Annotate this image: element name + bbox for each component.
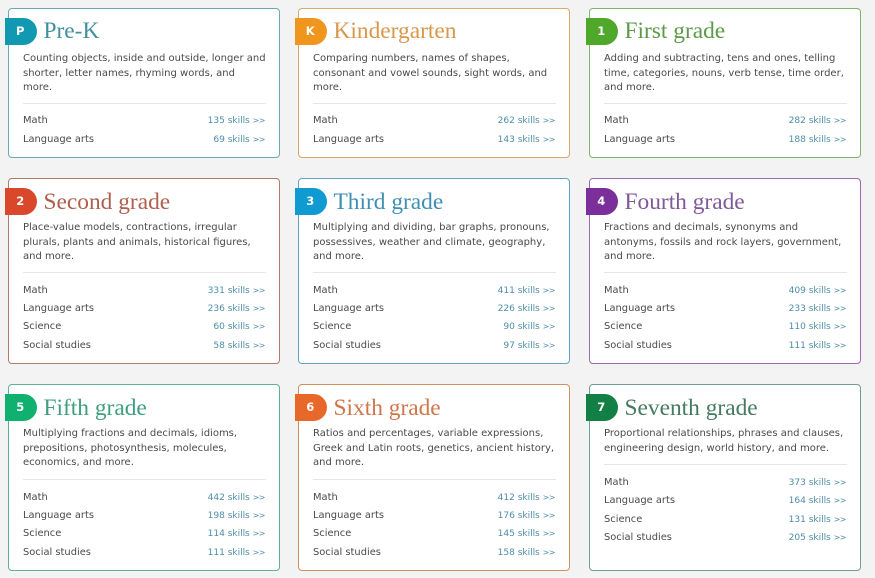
badge: 6: 6 [306, 400, 314, 414]
description [313, 53, 547, 93]
row: Math: 135 skills >> [208, 116, 265, 126]
badge: 7 [586, 394, 618, 421]
badge: 2 [5, 188, 36, 215]
row: Social studies: Social studies [604, 340, 672, 351]
badge: 1 [586, 18, 618, 45]
row: Language arts: 226 skills >> [498, 304, 555, 314]
row: Science: Science [23, 321, 61, 332]
row: Math: Math [604, 285, 629, 296]
row: Science [23, 321, 265, 332]
row: Math: 409 skills >> [789, 286, 846, 296]
description [23, 428, 237, 468]
badge: 1: 1 [597, 24, 605, 38]
row: Language arts: Language arts [313, 303, 384, 314]
row: Social studies: Social studies [313, 547, 381, 558]
row: Science: 90 skills >> [503, 322, 555, 332]
description: Fractions and decimals, synonyms and [604, 222, 798, 233]
badge: P [5, 18, 36, 45]
row: Science [604, 514, 846, 525]
row: Language arts: Language arts [23, 134, 94, 145]
row: Math [23, 115, 265, 126]
panel: Pre-K [8, 8, 280, 158]
row: Language arts: Language arts [604, 134, 675, 145]
description: plurals, plants and animals, historical figures, [23, 237, 251, 248]
badge: 6 [295, 394, 326, 421]
row: Math: Math [604, 477, 629, 488]
row: Math [313, 492, 555, 503]
row: Social studies [313, 340, 555, 351]
row: Math [604, 477, 846, 488]
row: Science: 131 skills >> [789, 515, 846, 525]
description: and more. [23, 251, 74, 262]
description: Proportional relationships, phrases and clauses, [604, 428, 843, 439]
row: Language arts [313, 510, 555, 521]
row: Math: 262 skills >> [498, 116, 555, 126]
description: Ratios and percentages, variable expressions, [313, 428, 543, 439]
description [604, 428, 843, 454]
row: Social studies [23, 547, 265, 558]
row: Language arts [604, 495, 846, 506]
badge: P: P [16, 24, 24, 38]
description: more. [23, 82, 52, 93]
description: and more. [604, 251, 655, 262]
heading: Fifth grade: Fifth grade [44, 395, 147, 421]
badge: K [295, 18, 326, 45]
heading: Pre-K: Pre-K [44, 18, 99, 44]
panel: Fourth grade [589, 178, 861, 364]
row: Math: 331 skills >> [208, 286, 265, 296]
row: Language arts: Language arts [23, 510, 94, 521]
row: Social studies: Social studies [313, 340, 381, 351]
row: Math [313, 115, 555, 126]
row: Language arts: 198 skills >> [208, 511, 265, 521]
description: consonant and vowel sounds, sight words, and [313, 68, 547, 79]
panel: Third grade [298, 178, 570, 364]
description [313, 428, 554, 468]
description: possessives, weather and climate, geography, [313, 237, 545, 248]
row: Science [313, 321, 555, 332]
description: and more. [604, 82, 655, 93]
description: shorter, letter names, rhyming words, and [23, 68, 235, 79]
panel: Seventh grade [589, 384, 861, 571]
description: and more. [313, 251, 364, 262]
description [604, 53, 844, 93]
row: Science: 60 skills >> [213, 322, 265, 332]
row: Science: Science [604, 321, 642, 332]
row: Math: Math [23, 285, 48, 296]
badge: 4 [586, 188, 618, 215]
badge: K: K [306, 24, 315, 38]
row: Science: 114 skills >> [208, 529, 265, 539]
heading: Seventh grade: Seventh grade [624, 395, 758, 421]
description: antonyms, fossils and rock layers, government, [604, 237, 841, 248]
row: Math [604, 115, 846, 126]
panel: Second grade [8, 178, 280, 364]
row: Language arts: Language arts [604, 303, 675, 314]
description: Greek and Latin roots, genetics, ancient history, [313, 443, 554, 454]
heading: Fourth grade: Fourth grade [624, 189, 745, 215]
heading: Second grade: Second grade [44, 189, 170, 215]
description [313, 222, 550, 262]
description [604, 222, 841, 262]
description: Multiplying and dividing, bar graphs, pronouns, [313, 222, 550, 233]
panel: Kindergarten [298, 8, 570, 158]
row: Language arts: Language arts [23, 303, 94, 314]
row: Math: Math [313, 115, 338, 126]
badge: 5 [5, 394, 36, 421]
row: Math [23, 285, 265, 296]
row: Science [604, 321, 846, 332]
badge: 4: 4 [597, 194, 605, 208]
row: Math: 373 skills >> [789, 478, 846, 488]
row: Science: 110 skills >> [789, 322, 846, 332]
row: Language arts: 164 skills >> [789, 496, 846, 506]
row: Social studies: 158 skills >> [498, 548, 555, 558]
row: Math [604, 285, 846, 296]
badge: 2: 2 [16, 194, 24, 208]
row: Social studies: 97 skills >> [503, 341, 555, 351]
row: Language arts [23, 134, 265, 145]
panel: Fifth grade [8, 384, 280, 571]
row: Language arts: 69 skills >> [213, 135, 265, 145]
heading: Third grade: Third grade [334, 189, 443, 215]
row: Language arts: 233 skills >> [789, 304, 846, 314]
row: Science: Science [604, 514, 642, 525]
row: Social studies [23, 340, 265, 351]
row: Social studies: Social studies [23, 340, 91, 351]
row: Language arts: 176 skills >> [498, 511, 555, 521]
heading: Kindergarten: Kindergarten [334, 18, 456, 44]
description: and more. [313, 457, 364, 468]
row: Social studies: 58 skills >> [213, 341, 265, 351]
badge: 3 [295, 188, 326, 215]
row: Language arts: Language arts [313, 510, 384, 521]
description: economics, and more. [23, 457, 134, 468]
row: Math [23, 492, 265, 503]
description: engineering design, world history, and more. [604, 443, 829, 454]
row: Language arts [23, 510, 265, 521]
row: Social studies [313, 547, 555, 558]
row: Social studies: Social studies [604, 532, 672, 543]
row: Language arts: Language arts [313, 134, 384, 145]
description: Counting objects, inside and outside, longer and [23, 53, 266, 64]
row: Language arts: 143 skills >> [498, 135, 555, 145]
row: Math: Math [313, 285, 338, 296]
row: Language arts: 236 skills >> [208, 304, 265, 314]
row: Language arts [23, 303, 265, 314]
row: Math: Math [23, 115, 48, 126]
row: Math: 442 skills >> [208, 493, 265, 503]
panel: First grade [589, 8, 861, 158]
row: Science: 145 skills >> [498, 529, 555, 539]
row: Science [23, 528, 265, 539]
description: more. [313, 82, 342, 93]
row: Social studies: Social studies [23, 547, 91, 558]
description [23, 222, 251, 262]
description: Comparing numbers, names of shapes, [313, 53, 510, 64]
row: Social studies: 111 skills >> [789, 341, 846, 351]
row: Math: Math [23, 492, 48, 503]
heading: Sixth grade: Sixth grade [334, 395, 441, 421]
badge: 3: 3 [306, 194, 314, 208]
description [23, 53, 266, 93]
row: Math: Math [604, 115, 629, 126]
description: Place-value models, contractions, irregular [23, 222, 237, 233]
row: Social studies [604, 340, 846, 351]
row: Social studies [604, 532, 846, 543]
heading: First grade: First grade [624, 18, 725, 44]
row: Math: 412 skills >> [498, 493, 555, 503]
badge: 5: 5 [16, 400, 24, 414]
row: Social studies: 111 skills >> [208, 548, 265, 558]
row: Language arts [313, 134, 555, 145]
row: Social studies: 205 skills >> [789, 533, 846, 543]
description: Multiplying fractions and decimals, idioms, [23, 428, 237, 439]
row: Language arts: 188 skills >> [789, 135, 846, 145]
row: Language arts [313, 303, 555, 314]
row: Science [313, 528, 555, 539]
row: Language arts [604, 134, 846, 145]
row: Language arts: Language arts [604, 495, 675, 506]
description: Adding and subtracting, tens and ones, telling [604, 53, 835, 64]
badge: 7: 7 [597, 400, 605, 414]
row: Math: Math [313, 492, 338, 503]
row: Science: Science [313, 528, 351, 539]
description: time, categories, nouns, verb tense, time order, [604, 68, 844, 79]
row: Math: 282 skills >> [789, 116, 846, 126]
row: Language arts [604, 303, 846, 314]
description: prepositions, photosynthesis, molecules, [23, 443, 227, 454]
row: Math [313, 285, 555, 296]
row: Science: Science [23, 528, 61, 539]
row: Science: Science [313, 321, 351, 332]
panel: Sixth grade [298, 384, 570, 571]
row: Math: 411 skills >> [498, 286, 555, 296]
